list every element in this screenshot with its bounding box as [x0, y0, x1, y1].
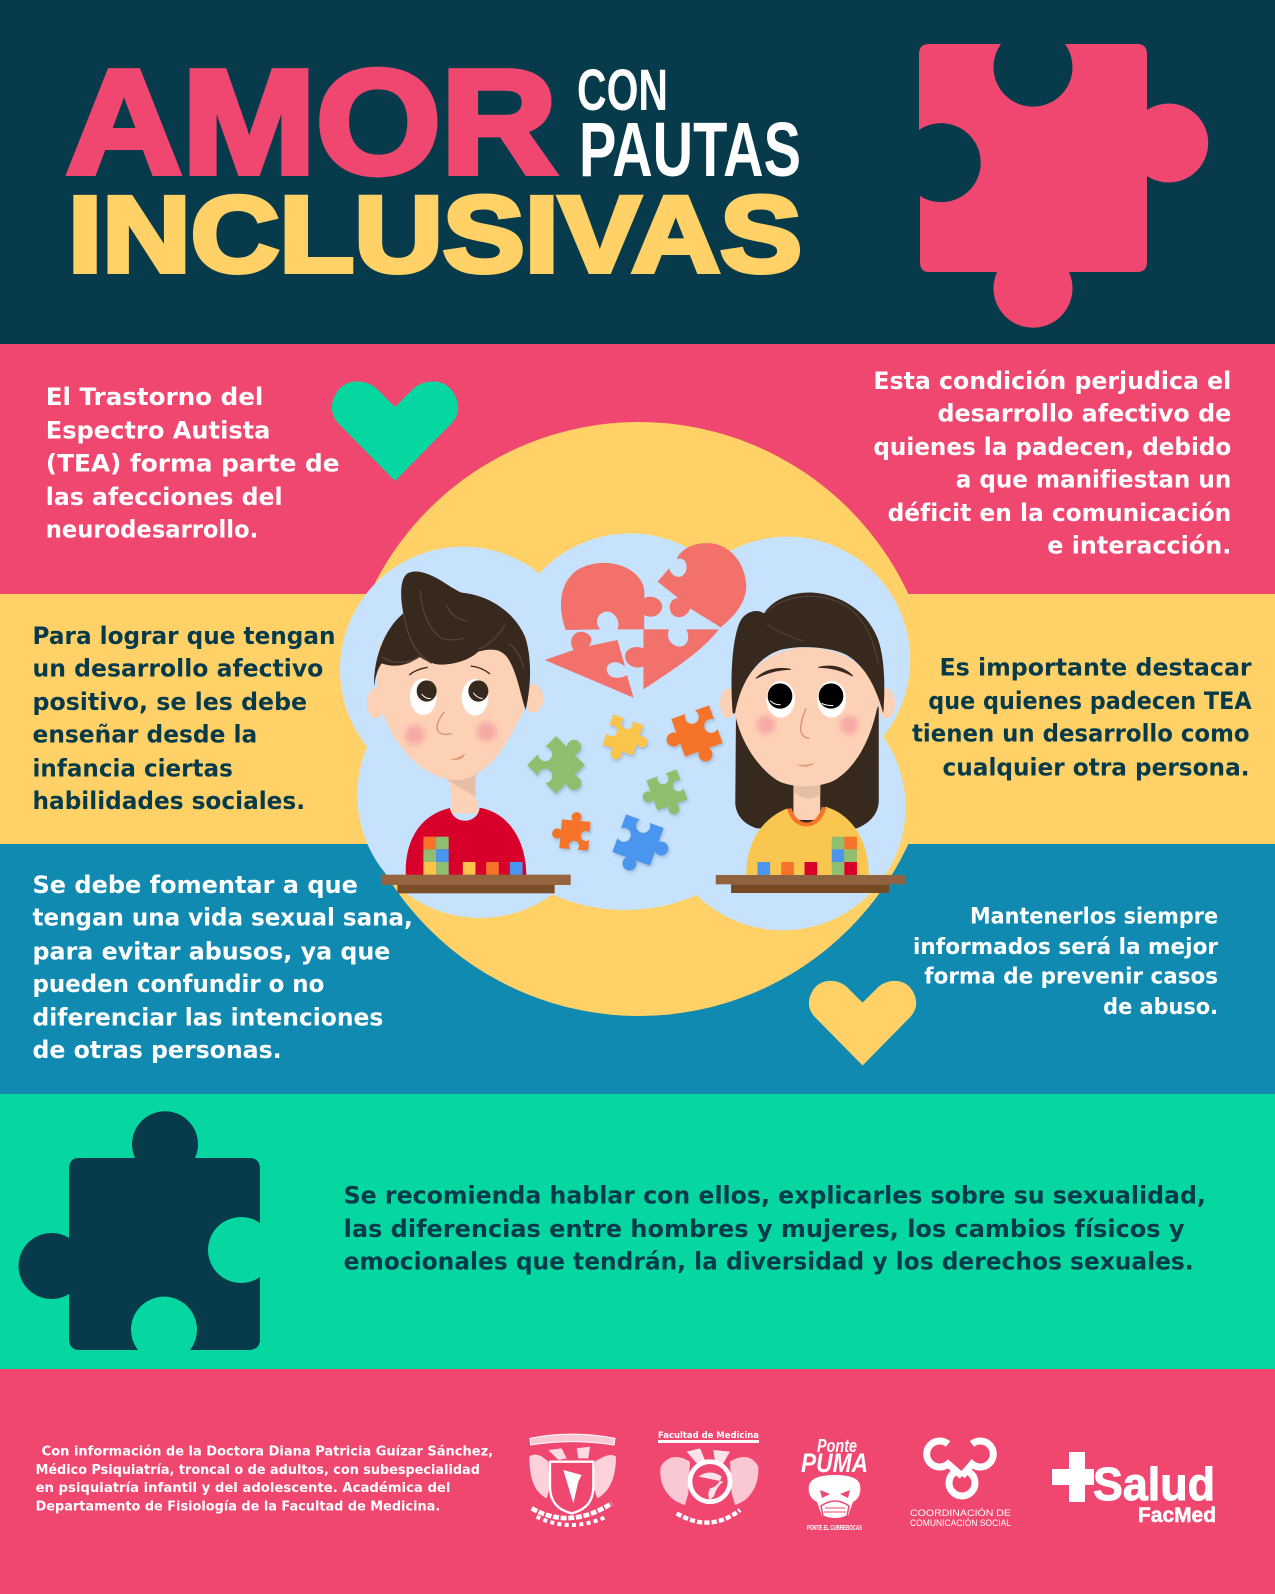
text block: recommendation — [344, 1180, 1206, 1275]
text block: healthy sexual life: para evitar abusos, ya que — [33, 936, 390, 965]
text block: social skills: habilidades sociales. — [33, 786, 305, 815]
text block: healthy sexual life: pueden confundir o no — [33, 969, 324, 998]
text block: source credit: Departamento de Fisiología de la Facultad de Medicina. — [36, 1498, 440, 1514]
text block: healthy sexual life: diferenciar las intenciones — [33, 1002, 383, 1031]
text block: keep informed: forma de prevenir casos — [924, 964, 1218, 990]
icon: yellow heart — [809, 981, 916, 1066]
text block: affective development: e interacción. — [1047, 531, 1231, 560]
text block: social skills: un desarrollo afectivo — [33, 654, 323, 683]
logo: Ponte Puma: Ponte — [817, 1436, 857, 1456]
text block: source credit: Con información de la Doctora Diana Patricia Guízar Sánchez, — [42, 1443, 493, 1459]
header band — [0, 0, 1275, 344]
logo: Ponte Puma: PUMA — [801, 1448, 868, 1478]
logo: Coordinación de Comunicación Social: COMUNICACIÓN SOCIAL — [910, 1518, 1011, 1528]
text block: healthy sexual life: Se debe fomentar a que — [33, 870, 358, 899]
title — [66, 40, 802, 294]
text block: normal development: que quienes padecen TEA — [928, 686, 1252, 715]
logo: Coordinación de Comunicación Social — [910, 1441, 1011, 1528]
logo: Ponte Puma: PONTE EL CUBREBOCAS — [807, 1525, 862, 1532]
text block: affective development: déficit en la comunicación — [888, 498, 1231, 527]
girl head — [720, 593, 895, 786]
logo: Facultad de Medicina — [658, 1431, 759, 1523]
text block: source credit: Médico Psiquiatría, troncal o de adultos, con subespecialidad — [36, 1462, 480, 1478]
icon: pink puzzle piece — [919, 44, 1208, 328]
text block: healthy sexual life — [33, 870, 413, 1064]
band: footer — [0, 1369, 1275, 1594]
band: yellow — [0, 594, 1275, 844]
text block: healthy sexual life: de otras personas. — [33, 1035, 282, 1064]
logo: +Salud FacMed: Salud — [1093, 1458, 1215, 1510]
text block: affective development: quienes la padecen, debido — [873, 432, 1231, 461]
text block: recommendation: Se recomienda hablar con ellos, explicarles sobre su sexualidad, — [344, 1180, 1206, 1209]
text block: healthy sexual life: tengan una vida sexual sana, — [33, 903, 413, 932]
logo: Coordinación de Comunicación Social: COORDINACIÓN DE — [910, 1508, 1011, 1519]
text block: keep informed: informados será la mejor — [913, 934, 1218, 960]
broken puzzle heart — [545, 543, 746, 698]
title: PAUTAS — [579, 107, 801, 193]
text block: TEA definition — [46, 382, 340, 543]
text block: social skills — [33, 621, 336, 815]
logo: Facultad de Medicina: Facultad de Medicina — [658, 1431, 759, 1441]
text block: TEA definition: neurodesarrollo. — [46, 514, 258, 543]
boy body — [381, 768, 571, 893]
text block: affective development: Esta condición perjudica el — [873, 366, 1231, 395]
icon: navy puzzle piece — [19, 1111, 260, 1350]
title: AMOR — [66, 40, 557, 205]
text block: TEA definition: las afecciones del — [46, 482, 283, 511]
text block: social skills: Para lograr que tengan — [33, 621, 336, 650]
title: CON — [577, 58, 668, 123]
text block: normal development: cualquier otra persona. — [943, 752, 1250, 781]
text block: TEA definition: Espectro Autista — [46, 416, 270, 445]
band: pink — [0, 344, 1275, 594]
text block: affective development: a que manifiestan un — [956, 465, 1231, 494]
band: green — [0, 1094, 1275, 1369]
boy head — [367, 572, 543, 780]
illustration — [340, 533, 910, 930]
text block: TEA definition: (TEA) forma parte de — [46, 448, 340, 477]
text block: social skills: enseñar desde la — [33, 720, 257, 749]
text block: normal development: tienen un desarrollo como — [912, 719, 1250, 748]
text block: recommendation: emocionales que tendrán, la diversidad y los derechos sexuales. — [344, 1246, 1194, 1275]
logo: Ponte Puma — [801, 1436, 868, 1532]
text block: keep informed: de abuso. — [1103, 994, 1218, 1020]
icon: green heart — [332, 381, 458, 481]
band: blue — [0, 844, 1275, 1094]
text block: keep informed: Mantenerlos siempre — [970, 904, 1218, 930]
logo: UNAM crest — [529, 1434, 616, 1525]
text block: source credit: en psiquiatría infantil y del adolescente. Académica del — [36, 1480, 450, 1496]
blue cloud — [340, 533, 910, 930]
text block: recommendation: las diferencias entre hombres y mujeres, los cambios físicos y — [344, 1214, 1185, 1243]
logo: +Salud FacMed — [1052, 1452, 1216, 1527]
text block: affective development — [873, 366, 1231, 560]
text block: keep informed — [913, 904, 1218, 1020]
text block: normal development: Es importante destacar — [939, 653, 1252, 682]
text block: source credit — [36, 1443, 493, 1514]
text block: social skills: infancia ciertas — [33, 753, 233, 782]
text block: TEA definition: El Trastorno del — [46, 382, 263, 411]
title: INCLUSIVAS — [68, 174, 802, 294]
girl body — [716, 707, 905, 893]
logo: +Salud FacMed: FacMed — [1138, 1504, 1216, 1527]
text block: normal development — [912, 653, 1252, 781]
illustration circle background — [342, 422, 936, 1016]
text block: affective development: desarrollo afectivo de — [937, 398, 1231, 427]
text block: social skills: positivo, se les debe — [33, 687, 307, 716]
scattered puzzle pieces — [527, 705, 727, 881]
